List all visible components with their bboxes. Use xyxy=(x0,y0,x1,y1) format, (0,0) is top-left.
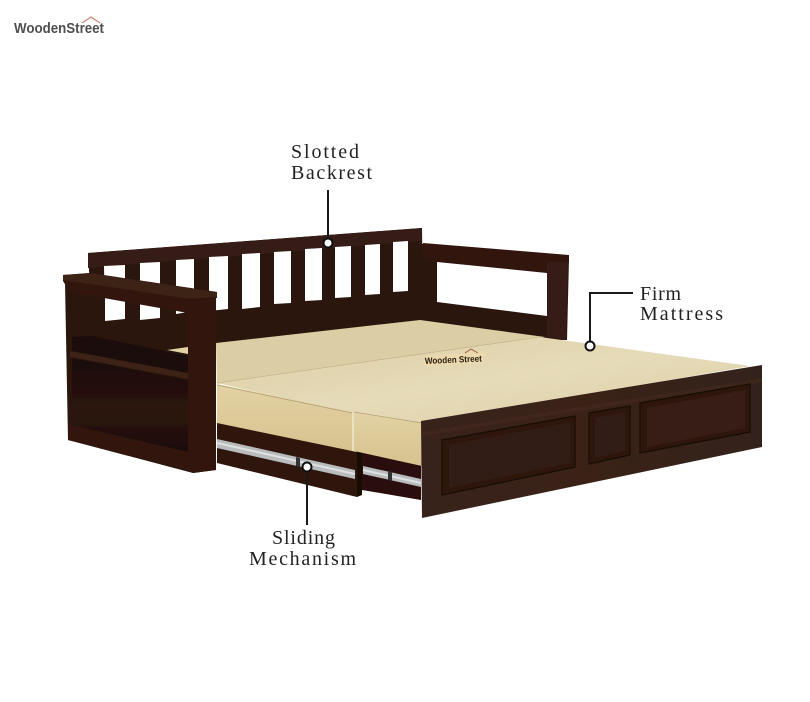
upper shelf xyxy=(72,336,188,373)
callout: Sliding Mechanism: Mechanism xyxy=(249,548,356,570)
callout: Firm Mattress: Firm xyxy=(640,283,681,305)
sofa bed illustration xyxy=(63,228,762,518)
mattress tag: Wooden Street: Wooden Street xyxy=(425,354,482,366)
arm top rail xyxy=(63,273,217,313)
callout: Slotted Backrest: Slotted xyxy=(291,141,359,163)
back mattress cushion xyxy=(216,320,545,384)
front post xyxy=(188,297,216,473)
logo: Wooden Street: WoodenStreet xyxy=(14,20,104,37)
callout: Sliding Mechanism: Sliding xyxy=(272,527,335,549)
backrest xyxy=(88,228,423,345)
callout: Firm Mattress: Mattress xyxy=(640,303,723,325)
callout: Slotted Backrest: Backrest xyxy=(291,162,372,184)
left armrest and shelf xyxy=(63,273,217,473)
arm openings xyxy=(105,298,188,321)
lower cabinet xyxy=(72,358,188,452)
callout: Firm Mattress xyxy=(586,283,723,350)
front mattress xyxy=(217,337,750,466)
backrest slots xyxy=(104,241,408,321)
callout: Slotted Backrest xyxy=(291,141,372,248)
right armrest xyxy=(413,241,569,340)
sliding rails: drawer frames xyxy=(217,420,421,500)
callout: Sliding Mechanism xyxy=(249,462,356,570)
footboard xyxy=(421,365,762,518)
mattress sliver xyxy=(167,347,188,354)
